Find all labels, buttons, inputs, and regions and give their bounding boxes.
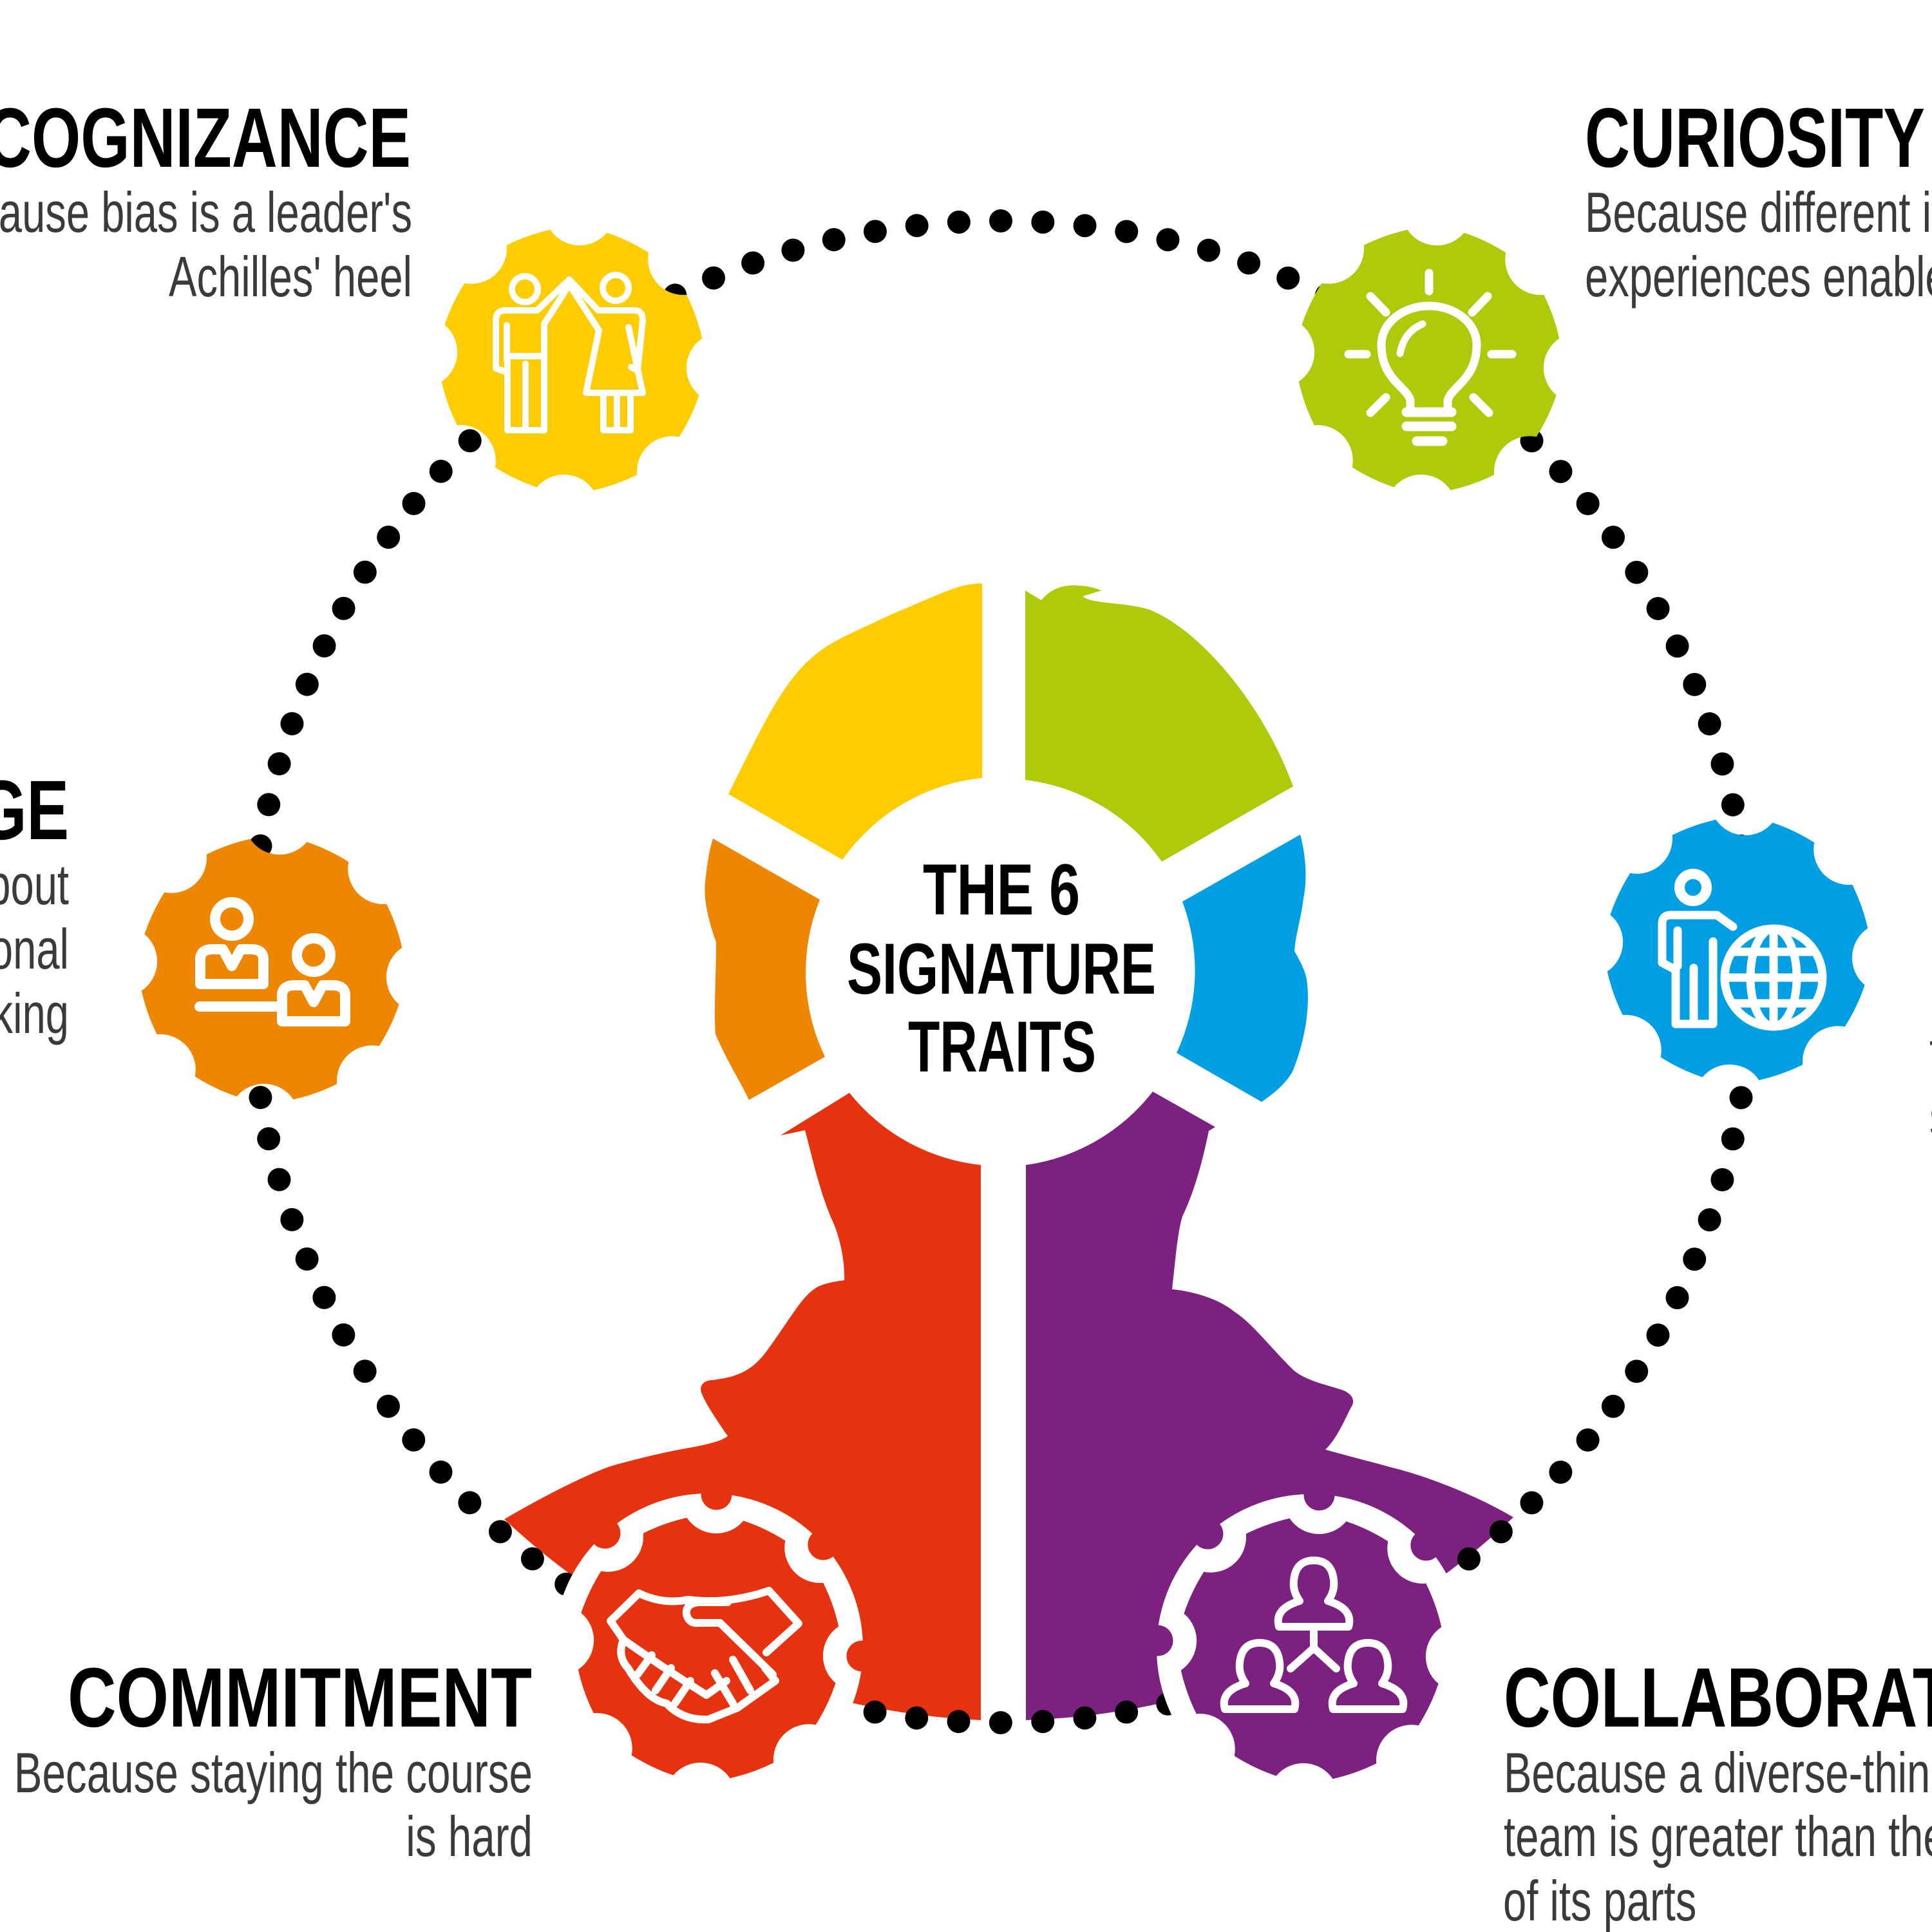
text: collaboration: of its parts xyxy=(1503,1870,1696,1932)
centre title: THE 6 xyxy=(923,849,1080,930)
icon: three connected people xyxy=(1224,1560,1403,1709)
text: cognizance: COGNIZANCE xyxy=(0,90,411,185)
trait: collaboration gear and icon xyxy=(1150,1487,1473,1810)
trait: cultural intelligence gear and icon xyxy=(1602,815,1873,1085)
text: collaboration xyxy=(1503,1650,1932,1932)
segment: green xyxy=(1025,585,1293,862)
text: commitment: COMMITMENT xyxy=(68,1650,532,1745)
segment: yellow xyxy=(728,583,982,860)
centre title: SIGNATURE xyxy=(847,929,1156,1009)
segment: purple shoulder xyxy=(1026,1092,1513,1720)
icon: two people xyxy=(200,902,345,1021)
text: commitment: Because staying the course xyxy=(14,1742,533,1804)
text: cultural intelligence xyxy=(1929,957,1932,1148)
trait: courage gear and icon xyxy=(137,834,407,1104)
centre title: TRAITS xyxy=(908,1007,1096,1087)
head silhouette split in six coloured segments xyxy=(504,583,1513,1720)
text: commitment xyxy=(14,1650,533,1868)
centre title xyxy=(847,849,1156,1087)
text: courage xyxy=(0,762,69,1045)
text: commitment: is hard xyxy=(406,1806,533,1868)
segment: blue xyxy=(1177,835,1308,1102)
segment: orange xyxy=(705,838,825,1100)
icon: person with globe xyxy=(1662,874,1823,1027)
icon: couple holding hands xyxy=(496,275,643,430)
trait: curiosity gear and icon xyxy=(1294,225,1564,495)
trait: commitment gear and icon xyxy=(547,1486,870,1810)
trait: cognizance gear and icon xyxy=(437,225,707,495)
icon: light bulb xyxy=(1349,273,1512,441)
dotted ring xyxy=(250,221,1752,1723)
icon: handshake xyxy=(611,1591,799,1719)
text: cognizance xyxy=(0,90,412,308)
segment: red shoulder xyxy=(504,1093,981,1720)
text: curiosity xyxy=(1585,90,1932,308)
text: cognizance: Achilles' heel xyxy=(169,246,412,308)
